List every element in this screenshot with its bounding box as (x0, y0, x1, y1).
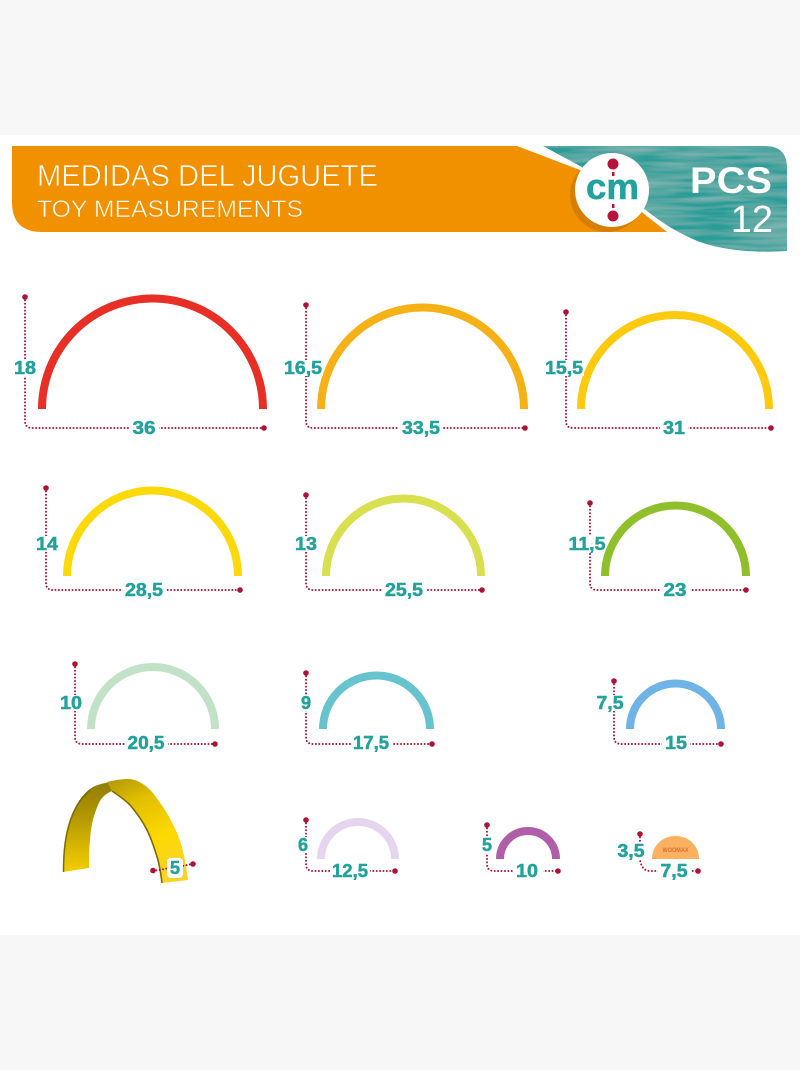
3D yellow arch (63, 779, 196, 883)
dimension lines (303, 670, 435, 747)
height label: 7,5 (596, 693, 624, 713)
arch 17,5 x 9 (299, 670, 435, 753)
dimension lines (22, 294, 267, 431)
dimension lines (303, 302, 528, 431)
arch 12,5 x 6 (296, 817, 398, 881)
arch right face (107, 779, 188, 883)
dimension lines (72, 661, 218, 747)
dimension lines (303, 492, 485, 593)
lime arch (326, 498, 481, 576)
height label: 3,5 (618, 841, 644, 861)
panel: teal piece count tab (543, 146, 787, 252)
height label: 11,5 (568, 534, 606, 554)
width label: 12,5 (332, 861, 368, 881)
width label: 23 (664, 580, 686, 600)
arch 10 x 5 (480, 822, 561, 881)
arch left leg (63, 780, 130, 872)
blue arch (630, 684, 721, 729)
width label: 20,5 (128, 733, 164, 753)
width label: 7,5 (660, 861, 688, 881)
background bottom band (0, 935, 800, 1070)
depth dimension (150, 861, 196, 873)
dimension lines (637, 831, 701, 874)
green arch (605, 506, 746, 576)
teal arch (323, 676, 430, 729)
background top band (0, 0, 800, 135)
title: spanish: MEDIDAS DEL JUGUETE (37, 158, 378, 193)
width label: 31 (663, 418, 685, 438)
height label: 15,5 (545, 358, 583, 378)
mint arch (91, 667, 215, 729)
title: english: TOY MEASUREMENTS (37, 196, 303, 223)
dimension lines (611, 678, 724, 747)
arch 28,5 x 14 (35, 485, 243, 600)
dimension lines (303, 817, 398, 874)
arch 15 x 7,5 (596, 678, 724, 753)
width label: 17,5 (353, 733, 389, 753)
width label: 15 (665, 733, 687, 753)
disc logo text: WOOMAX (662, 848, 688, 854)
width label (661, 580, 690, 600)
panel: orange title banner (12, 146, 667, 232)
height label: 18 (14, 358, 36, 378)
arch 33,5 x 16,5 (283, 302, 528, 438)
width label: 33,5 (402, 418, 440, 438)
lilac arch (321, 822, 395, 859)
text: 12: 12 (731, 199, 773, 241)
arch inner edge (112, 791, 162, 883)
arch 31 x 15,5 (544, 309, 774, 438)
arch 23 x 11,5 (568, 500, 749, 600)
text: PCS: PCS (690, 160, 772, 201)
orange arch (321, 308, 524, 409)
width label: 36 (132, 418, 156, 438)
arch 25,5 x 13 (294, 492, 485, 600)
dimension lines (587, 500, 749, 593)
yellow arch (67, 490, 238, 576)
half disc 7,5 x 3,5 (617, 831, 701, 881)
dimension lines (484, 822, 561, 874)
height label: 5 (482, 835, 492, 855)
purple arch (500, 831, 556, 859)
icon: cm badge (570, 153, 649, 232)
width label: 25,5 (385, 580, 423, 600)
width label (129, 418, 159, 438)
arch outer edge (64, 790, 90, 872)
header banner (12, 146, 787, 252)
orange half disc (652, 836, 699, 859)
height label: 9 (301, 693, 311, 713)
icon: cm badge: cm (586, 166, 639, 207)
red arch (42, 298, 263, 409)
depth label: 5 (170, 858, 180, 878)
dimension lines (43, 485, 243, 593)
width label: 28,5 (125, 580, 163, 600)
arch 36 x 18 (13, 294, 267, 438)
arch 20,5 x 10 (59, 661, 218, 753)
height label: 14 (36, 534, 58, 554)
height label: 6 (298, 835, 308, 855)
dimension lines (563, 309, 774, 431)
yellow-orange arch (581, 315, 769, 409)
height label: 10 (60, 693, 82, 713)
height label: 16,5 (284, 358, 322, 378)
height label: 13 (295, 534, 317, 554)
width label: 10 (516, 861, 538, 881)
